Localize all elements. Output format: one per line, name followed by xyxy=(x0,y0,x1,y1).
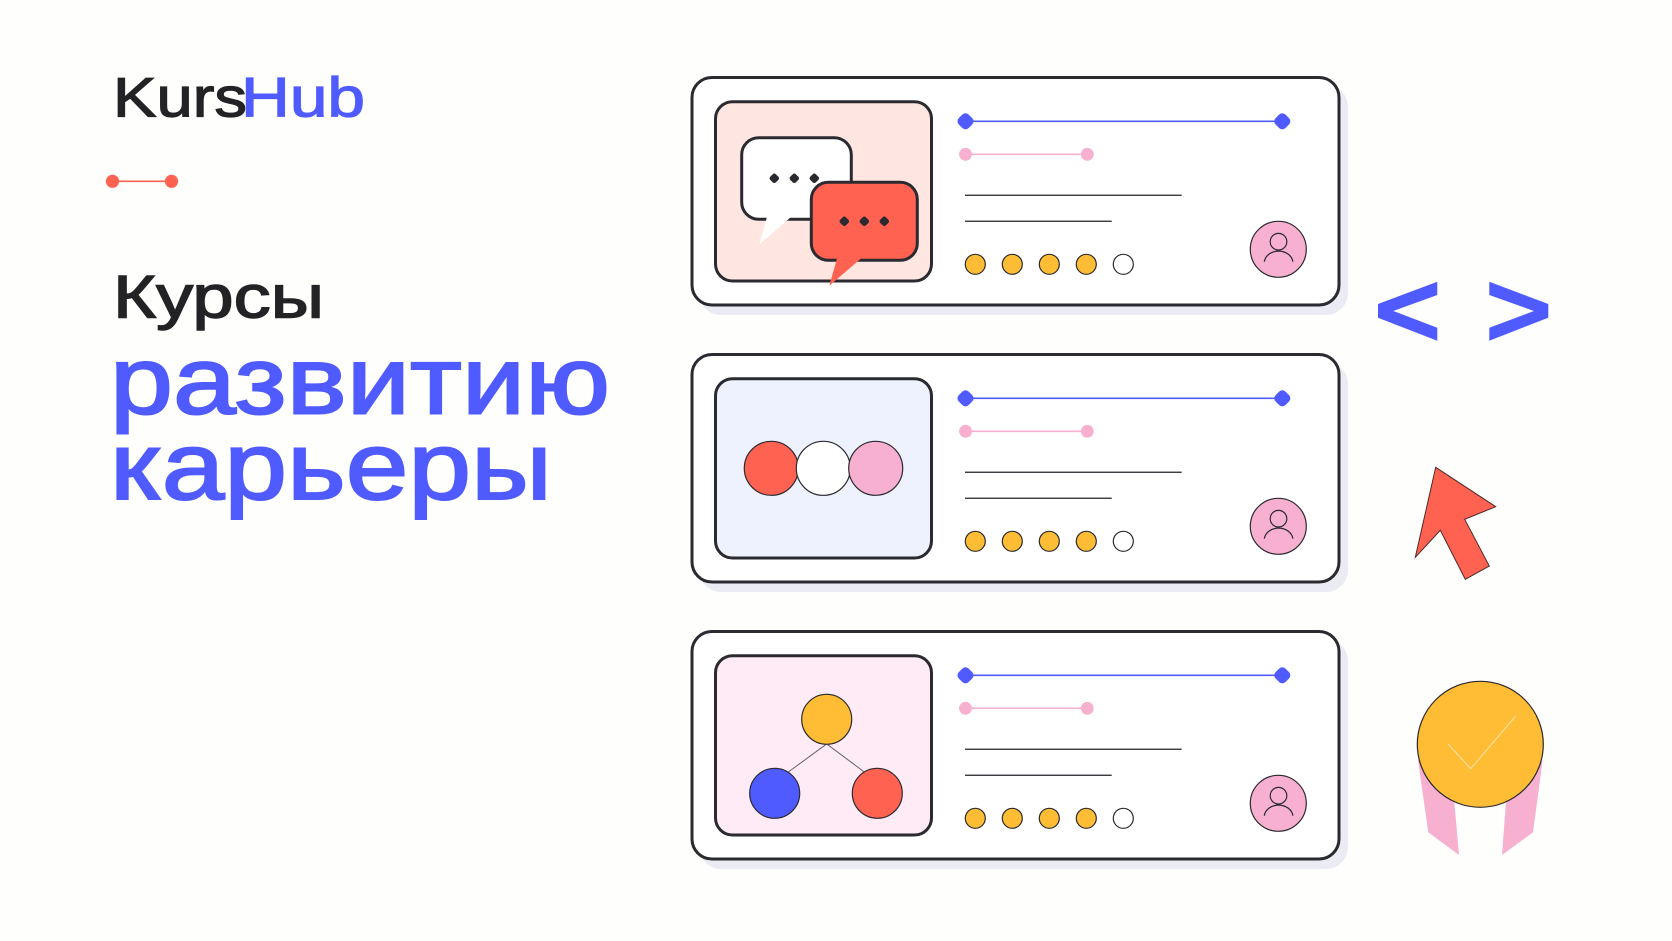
subtitle bar xyxy=(959,148,1094,161)
logo: Hub xyxy=(241,66,365,129)
icon: cursor arrow xyxy=(1415,467,1496,579)
subtitle bar xyxy=(959,702,1094,715)
thumbnail: three circles xyxy=(716,379,932,558)
icon: code brackets xyxy=(1378,282,1548,341)
description lines xyxy=(965,195,1182,222)
medal disc xyxy=(1417,681,1543,807)
title bar xyxy=(956,388,1292,408)
title xyxy=(110,263,610,520)
description lines xyxy=(965,472,1182,499)
icon: avatar xyxy=(1250,775,1306,831)
rating dots xyxy=(965,254,1133,274)
thumbnail: chat bubbles xyxy=(716,102,932,286)
rating dots xyxy=(965,531,1133,551)
icon: avatar xyxy=(1250,498,1306,554)
title bar xyxy=(956,111,1292,131)
logo: Kurs xyxy=(113,66,247,129)
rating dots xyxy=(965,808,1133,828)
medal ribbons xyxy=(1418,760,1543,855)
icon: medal with check xyxy=(1417,681,1543,855)
title: Курсы xyxy=(113,263,324,330)
description lines xyxy=(965,749,1182,776)
title bar xyxy=(956,665,1292,685)
logo xyxy=(113,66,365,129)
check mark xyxy=(1448,716,1516,769)
accent divider xyxy=(106,175,178,188)
panel: course card 1 xyxy=(692,78,1348,315)
subtitle bar xyxy=(959,425,1094,438)
icon: avatar xyxy=(1250,221,1306,277)
panel: course card 2 xyxy=(692,354,1348,592)
thumbnail: node tree xyxy=(716,656,932,835)
panel: course card 3 xyxy=(692,632,1348,869)
title: развитию xyxy=(110,327,610,434)
title: карьеры xyxy=(110,413,552,520)
